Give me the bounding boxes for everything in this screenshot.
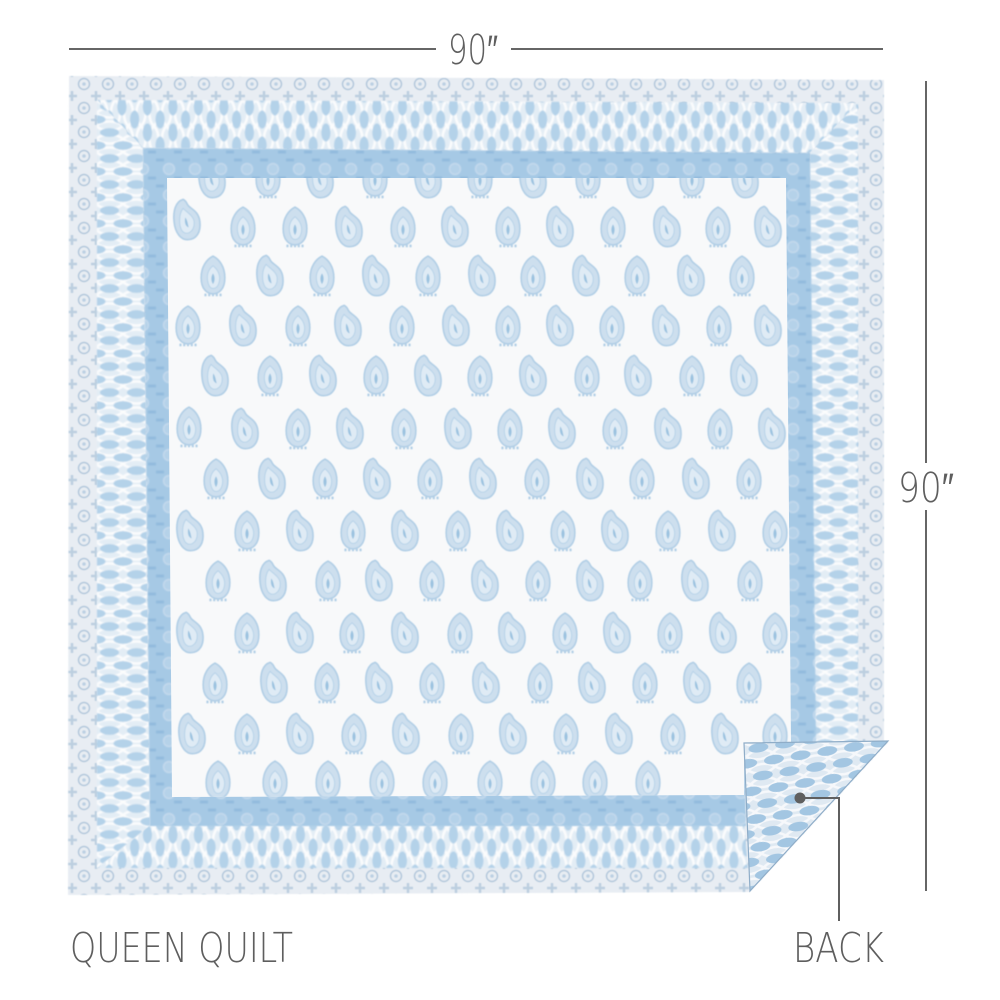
back callout leader (794, 792, 839, 921)
folded back corner flap (744, 741, 888, 891)
blue inner band (143, 148, 816, 826)
queen quilt label: QUEEN QUILT (70, 924, 293, 972)
quilt outer border (68, 76, 888, 895)
ikat border: left (97, 100, 150, 868)
back label: BACK (793, 924, 884, 972)
height dimension line (925, 81, 927, 891)
height label: 90″ (898, 464, 954, 512)
white centre panel (167, 178, 791, 797)
width label: 90″ (448, 26, 498, 74)
ikat border: top (97, 100, 858, 153)
ikat border: right (810, 103, 858, 742)
paisley motifs grid (174, 157, 787, 800)
ikat border: bottom (97, 825, 748, 868)
queen quilt illustration (68, 76, 888, 895)
width dimension line (69, 48, 883, 50)
